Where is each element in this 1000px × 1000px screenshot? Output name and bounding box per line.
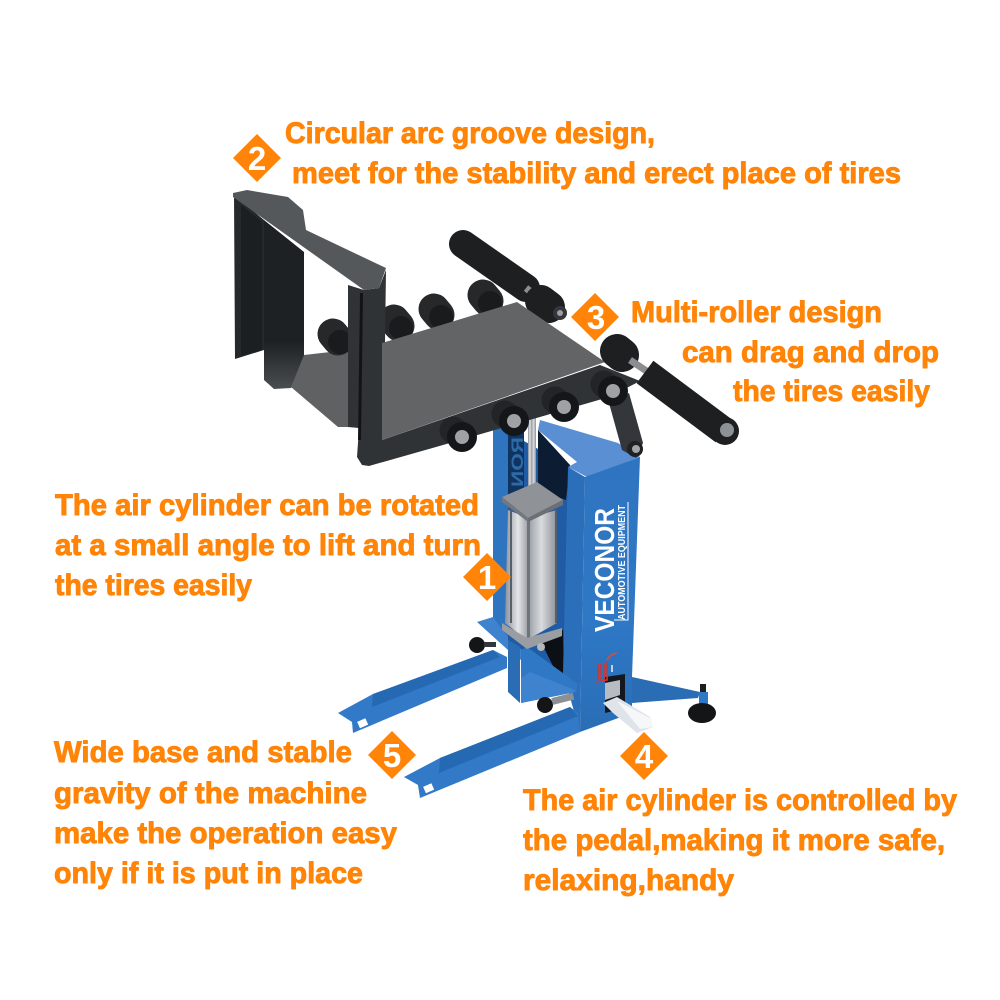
levelling foot xyxy=(688,684,716,723)
badge 1: 1 xyxy=(478,559,496,596)
text: air cylinder rotation: The air cylinder can be rotated xyxy=(55,489,479,522)
heading: multi-roller design: Multi-roller design xyxy=(631,296,882,329)
base uprights xyxy=(508,640,578,703)
logo tagline: AUTOMOTIVE EQUIPMENT xyxy=(616,505,628,620)
rear base plate xyxy=(477,617,578,692)
rear long roller xyxy=(463,244,567,320)
pedal opening xyxy=(605,674,625,713)
text: wide base: make the operation easy xyxy=(54,817,397,850)
badge 3 xyxy=(571,293,619,341)
front roller 1 xyxy=(447,422,477,452)
badge 1 xyxy=(463,553,511,601)
heading: multi-roller design: the tires easily xyxy=(733,375,930,408)
heading: circular arc groove design: meet for the stability and erect place of tires xyxy=(292,157,901,190)
tire frame front column xyxy=(348,270,640,466)
tire frame back column xyxy=(234,195,304,389)
frame front post shadow xyxy=(358,293,363,440)
badge 4 xyxy=(620,732,668,780)
rear roller 4 xyxy=(478,291,502,315)
text: pedal control: relaxing,handy xyxy=(523,864,734,897)
air cylinder xyxy=(502,482,563,651)
front roller 3 xyxy=(549,392,579,422)
text: air cylinder rotation: the tires easily xyxy=(55,569,252,602)
tower front face xyxy=(580,457,640,732)
text: pedal control: The air cylinder is controlled by xyxy=(523,784,957,817)
front roller 2 xyxy=(499,406,529,436)
tower top cap xyxy=(538,420,640,477)
text: wide base xyxy=(54,736,397,890)
text: wide base: Wide base and stable xyxy=(54,736,352,769)
text: air cylinder rotation: at a small angle to lift and turn xyxy=(55,529,481,562)
front roller 4 xyxy=(598,376,628,406)
piston rod xyxy=(528,415,536,495)
rear roller 1 xyxy=(328,330,352,354)
machine: tire lift xyxy=(233,190,739,798)
heading: circular arc groove design: Circular arc groove design, xyxy=(285,117,655,150)
text: wide base: only if it is put in place xyxy=(54,857,363,890)
badge 2 xyxy=(233,134,281,182)
warning mark xyxy=(596,653,617,682)
pedal xyxy=(603,680,653,733)
tower narrow side xyxy=(563,467,585,732)
text: pedal control xyxy=(523,784,957,897)
heading: circular arc groove design xyxy=(285,117,901,190)
logo rule xyxy=(614,502,628,620)
badge 4: 4 xyxy=(635,738,654,775)
heading: multi-roller design xyxy=(631,296,939,408)
rear roller 3 xyxy=(429,305,453,329)
badge 5: 5 xyxy=(383,737,401,774)
text: wide base: gravity of the machine xyxy=(54,777,367,810)
mirrored logo on inner wall: RON xyxy=(508,437,527,487)
front side roller xyxy=(617,351,739,445)
text: pedal control: the pedal,making it more safe, xyxy=(523,824,945,857)
heading: multi-roller design: can drag and drop xyxy=(682,336,939,369)
badge 2: 2 xyxy=(248,140,266,177)
tower rear strip xyxy=(493,425,510,640)
main platform xyxy=(382,302,605,440)
badge 5 xyxy=(368,731,416,779)
support arm xyxy=(609,393,643,458)
rear roller 2 xyxy=(389,316,413,340)
adjustment knobs xyxy=(469,637,574,713)
left base leg xyxy=(338,650,507,733)
tire frame lower plate xyxy=(291,350,348,427)
text: air cylinder rotation xyxy=(55,489,481,602)
tire frame top rim xyxy=(233,190,386,290)
right base leg xyxy=(404,707,580,798)
right foot bracket xyxy=(632,677,700,703)
logo VECONOR: VECONOR xyxy=(589,508,620,632)
tower interior xyxy=(508,430,570,680)
badge 3: 3 xyxy=(587,299,605,336)
